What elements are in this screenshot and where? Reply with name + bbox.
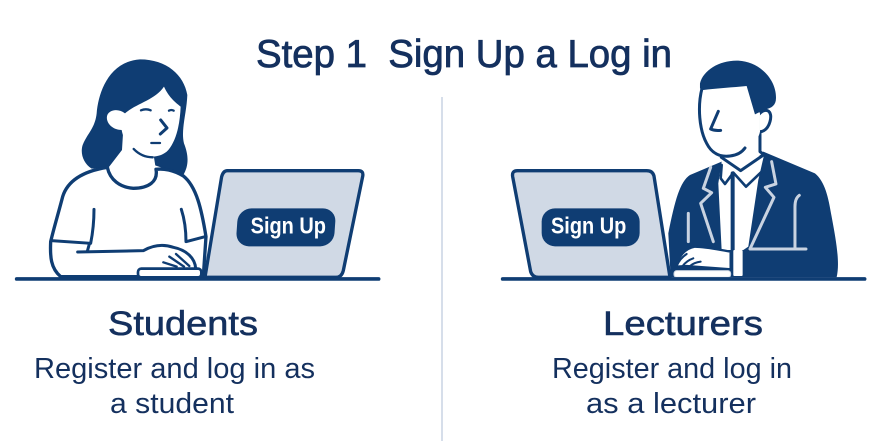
icon: lecturer jacket bbox=[668, 152, 838, 277]
text: lecturers description bbox=[552, 353, 792, 420]
lecturer tie and collar bbox=[721, 165, 762, 250]
panel: lecturer illustration bbox=[503, 61, 865, 279]
text: lecturers description: Register and log in bbox=[552, 353, 792, 385]
title: Step 1 Sign Up a Log in bbox=[256, 33, 672, 76]
icon: student neck bbox=[109, 128, 156, 170]
text: students description: Register and log in as bbox=[34, 353, 315, 385]
center divider bbox=[441, 97, 443, 441]
icon: lecturer hand and cuff bbox=[676, 247, 731, 269]
sign up button bbox=[236, 208, 336, 246]
sign up button: Sign Up bbox=[551, 213, 626, 239]
icon: trackpad bbox=[138, 269, 201, 277]
icon: laptop screen bbox=[205, 171, 363, 277]
icon: lecturer face bbox=[700, 85, 760, 156]
icon: student hair bbox=[82, 59, 188, 175]
icon: lecturer neck bbox=[720, 133, 762, 171]
desk line bbox=[503, 273, 865, 284]
icon: lecturer shirt bbox=[718, 155, 764, 250]
icon: student face bbox=[107, 87, 181, 157]
icon: lecturer ear bbox=[758, 110, 771, 132]
icon: laptop screen bbox=[513, 171, 670, 277]
heading: lecturers: Lecturers bbox=[603, 305, 763, 343]
lecturer nose bbox=[711, 111, 721, 130]
student facial features bbox=[134, 109, 174, 157]
panel: students illustration bbox=[17, 59, 379, 279]
desk line bbox=[17, 273, 379, 284]
icon: student torso bbox=[50, 167, 206, 277]
text: lecturers description: as a lecturer bbox=[586, 388, 756, 420]
text: students description bbox=[34, 353, 315, 420]
icon: trackpad bbox=[674, 271, 731, 277]
icon: lecturer hair bbox=[700, 61, 776, 114]
student sleeve lines bbox=[51, 209, 205, 268]
sign up button bbox=[542, 208, 640, 246]
lecturer jacket lines bbox=[688, 162, 806, 249]
text: students description: a student bbox=[110, 388, 234, 420]
heading: students: Students bbox=[108, 305, 258, 343]
sign up button: Sign Up bbox=[251, 213, 326, 239]
